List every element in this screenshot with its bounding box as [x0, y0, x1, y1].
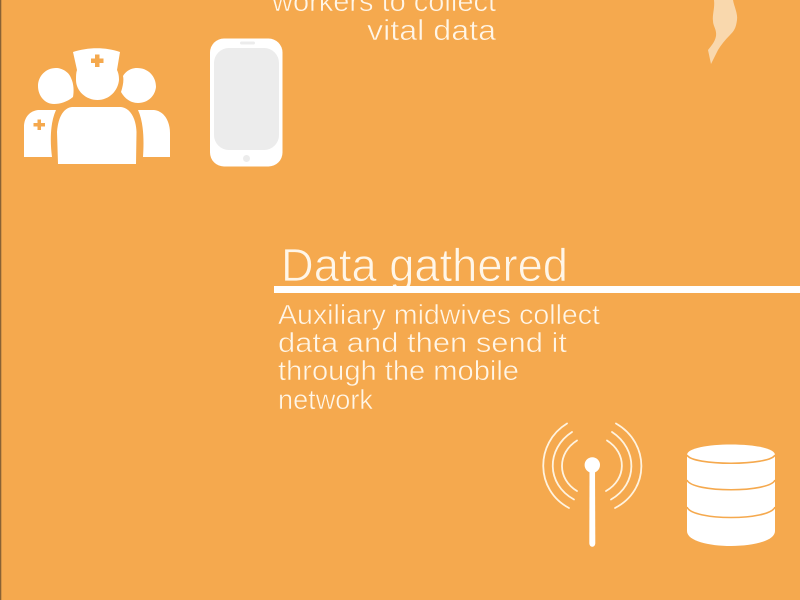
body text block: network: [278, 384, 374, 415]
intro text block: [271, 0, 497, 47]
heading: Data gathered: Data gathered: [281, 239, 568, 291]
icon: mobile antenna: [543, 424, 641, 547]
icon: smartphone: [210, 38, 282, 166]
center nurse: [57, 48, 136, 164]
icon: database: [687, 444, 775, 546]
body text block: [278, 299, 600, 415]
body text block: through the mobile: [278, 355, 519, 386]
intro text block: vital data: [367, 15, 497, 47]
body text block: data and then send it: [278, 327, 567, 358]
icon: health workers group: [24, 48, 170, 164]
back left worker: [24, 68, 74, 157]
heading underline: [274, 286, 800, 293]
icon: map fragment: [708, 0, 737, 64]
body text block: Auxiliary midwives collect: [278, 299, 600, 330]
back right worker: [121, 68, 170, 157]
